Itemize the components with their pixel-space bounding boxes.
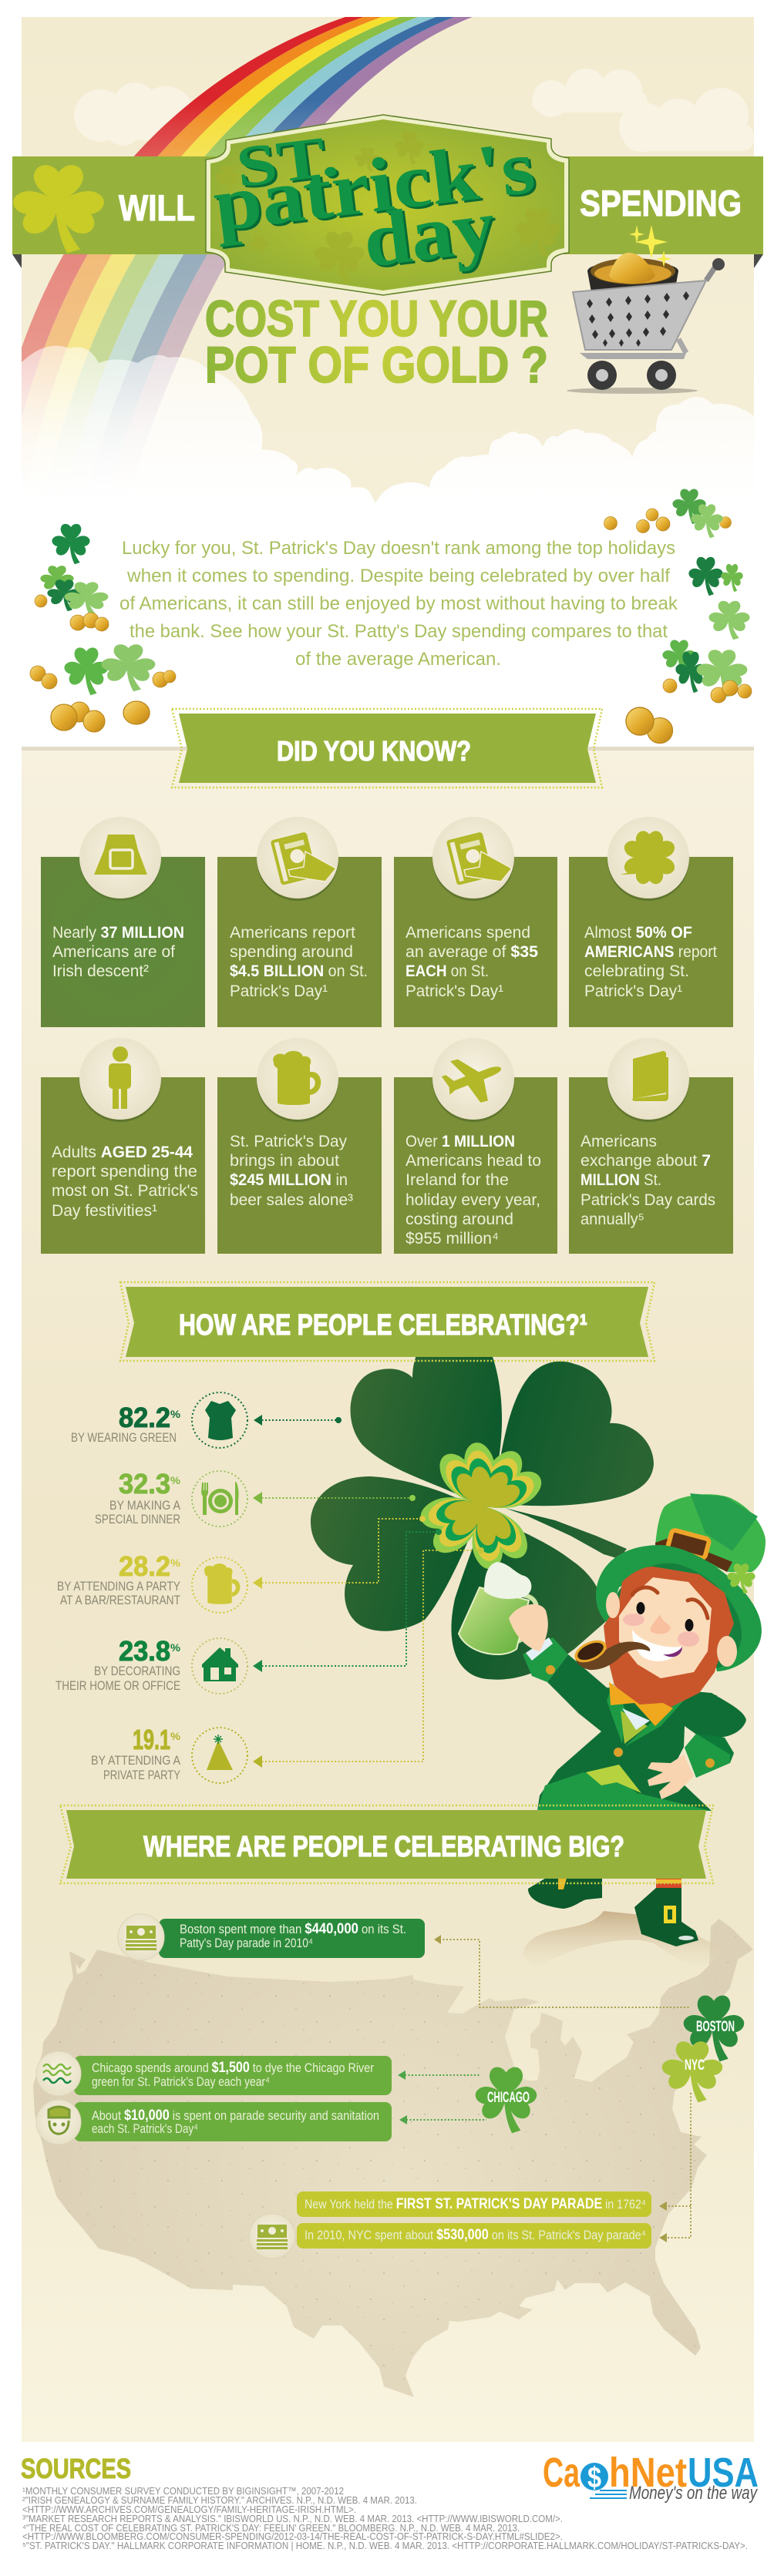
- icon: house: [202, 1647, 238, 1681]
- fact card: 35 each: EACH on St.: [406, 962, 489, 980]
- stat: wearing green: 82.2: [119, 1402, 170, 1433]
- fact card: beer sales: [217, 1038, 382, 1254]
- fact card: 4.5 billion: Americans report: [230, 924, 355, 942]
- heading banner: where are people celebrating big: [60, 1805, 713, 1883]
- badge: [607, 817, 689, 901]
- badge: [257, 817, 338, 901]
- sources list: ¹MONTHLY CONSUMER SURVEY CONDUCTED BY BIGINSIGHT™, 2007-2012: [22, 2485, 344, 2497]
- icon: cash: [257, 2225, 288, 2249]
- fact card: 35 each: an average of $35: [406, 943, 538, 961]
- logo: CashNetUSA: Ca: [543, 2450, 580, 2496]
- intro text: when it comes to spending. Despite being celebrated by over half: [126, 566, 670, 586]
- city marker: Chicago: [473, 2067, 539, 2133]
- fact card: almost 50 percent: Patrick's Day¹: [584, 982, 682, 1000]
- fact card: aged 25-44: report spending the: [52, 1163, 197, 1181]
- fact card: travel to Ireland: [394, 1038, 557, 1254]
- callout: Boston spending: [118, 1914, 425, 1960]
- title text: day: [361, 185, 503, 286]
- callout: first parade: [297, 2191, 651, 2217]
- stat: decorating: BY DECORATING: [94, 1664, 180, 1678]
- fact card: Irish descent: Nearly 37 MILLION: [52, 924, 184, 942]
- icon: clover: [620, 828, 678, 887]
- subtitle: COST YOU YOUR: [205, 290, 548, 347]
- logo: CashNetUSA: USA: [688, 2450, 759, 2496]
- icon: hat: [94, 835, 147, 875]
- title text: ST.: [233, 123, 342, 200]
- fact card: 35 each: [394, 817, 557, 1027]
- sources list: ²"IRISH GENEALOGY & SURNAME FAMILY HISTORY." ARCHIVES. N.P., N.D. WEB. 4 MAR. 2013.: [22, 2494, 417, 2506]
- badge: [257, 1038, 338, 1122]
- fact card: Irish descent: Americans are of: [52, 943, 175, 961]
- cheeks and nose: [623, 1614, 699, 1647]
- pot: [587, 253, 678, 304]
- icon: beer mug: [273, 1051, 321, 1105]
- city marker: Boston: BOSTON: [696, 2019, 735, 2035]
- bow tie: [609, 1682, 673, 1726]
- heading banner: did you know: [172, 709, 602, 788]
- icon: ribbon shamrock: [10, 165, 107, 254]
- ribbon word will: WILL: [119, 187, 195, 228]
- icon: plate and cutlery: [201, 1482, 239, 1515]
- fact card: aged 25-44: Day festivities¹: [52, 1202, 157, 1220]
- logo: CashNetUSA: [543, 2450, 759, 2504]
- badge: [607, 1038, 689, 1122]
- fact card: 4.5 billion: [217, 817, 382, 1027]
- fact card: greeting cards: [569, 1038, 733, 1254]
- fact card: 4.5 billion: Patrick's Day¹: [230, 982, 328, 1000]
- header ribbon: [10, 156, 763, 268]
- rainbow: [22, 17, 473, 436]
- icon: shopping cart with pot of gold: [567, 225, 725, 394]
- inner clover: [416, 1439, 547, 1573]
- fact card: beer sales: beer sales alone³: [230, 1191, 353, 1209]
- stat: decorating: [56, 1635, 247, 1694]
- connector lines: [258, 1420, 481, 1762]
- title text: day: [358, 183, 500, 284]
- badge: [432, 817, 514, 901]
- map connectors: [405, 1940, 691, 2238]
- stat: private party: %: [170, 1730, 181, 1742]
- ground shadow: [523, 1911, 725, 1966]
- ribbon word spending: SPENDING: [580, 183, 742, 223]
- fact card: almost 50 percent: AMERICANS report: [584, 943, 717, 961]
- fact card: travel to Ireland: Over 1 MILLION: [406, 1133, 515, 1150]
- decoration: shamrocks and coins right: [604, 489, 752, 743]
- icon: cash: [126, 1926, 156, 1950]
- fact card: beer sales: St. Patrick's Day: [230, 1133, 347, 1150]
- fact card: aged 25-44: most on St. Patrick's: [52, 1182, 198, 1200]
- fact card: 4.5 billion: spending around: [230, 943, 353, 961]
- stat: private party: PRIVATE PARTY: [103, 1768, 180, 1782]
- intro text: of the average American.: [295, 649, 501, 670]
- subtitle: POT OF GOLD ?: [205, 336, 548, 393]
- callout: NYC spending: [249, 2214, 651, 2259]
- body: [523, 1637, 746, 1811]
- stat: special dinner: 32.3: [119, 1468, 170, 1500]
- stat: private party: [91, 1724, 247, 1783]
- boots: [528, 1872, 698, 1946]
- leprechaun: [459, 1493, 766, 1946]
- badge: [249, 2214, 295, 2259]
- badge: [432, 1038, 514, 1122]
- stat: wearing green: %: [170, 1408, 181, 1420]
- fact card: travel to Ireland: holiday every year,: [406, 1191, 540, 1209]
- title text: patrick's: [211, 126, 542, 250]
- icon: card: [632, 1051, 668, 1101]
- connector arrowheads: [398, 1935, 667, 2242]
- callout: parade security: each St. Patrick's Day⁴: [92, 2121, 198, 2136]
- stat: wearing green: [71, 1392, 247, 1448]
- fact card: travel to Ireland: Americans head to: [406, 1152, 541, 1170]
- decoration: shamrocks and coins left: [30, 524, 176, 732]
- fact card: almost 50 percent: [569, 817, 733, 1027]
- sources heading: SOURCES: [21, 2453, 131, 2484]
- city marker: Chicago: CHICAGO: [487, 2090, 530, 2106]
- fact card: beer sales: $245 MILLION in: [230, 1171, 348, 1189]
- logo: CashNetUSA: $: [587, 2462, 601, 2494]
- callout: parade security: About $10,000 is spent on parade security and sanitation: [92, 2107, 379, 2124]
- callout: Chicago River dye: [36, 2051, 392, 2096]
- eyes: [637, 1602, 694, 1631]
- sources list: <HTTP://WWW.ARCHIVES.COM/GENEALOGY/FAMILY-HERITAGE-IRISH.HTML>.: [22, 2504, 356, 2515]
- stat: wearing green: BY WEARING GREEN: [71, 1430, 177, 1445]
- fact card: greeting cards: MILLION St.: [580, 1171, 661, 1189]
- background clouds: [74, 69, 754, 152]
- fact card: greeting cards: exchange about 7: [580, 1152, 711, 1170]
- callout: first parade: New York held the FIRST ST. PATRICK'S DAY PARADE in 1762⁴: [305, 2196, 646, 2212]
- sources list: ⁴"THE REAL COST OF CELEBRATING ST. PATRICK'S DAY: FEELIN' GREEN." BLOOMBERG. N.P., N.D. WEB. 4 MAR. 2013.: [22, 2522, 520, 2534]
- intro text: Lucky for you, St. Patrick's Day doesn't rank among the top holidays: [122, 538, 675, 559]
- stat: bar or restaurant party: BY ATTENDING A PARTY: [57, 1579, 180, 1594]
- eyebrows: [632, 1587, 708, 1618]
- callout: NYC spending: In 2010, NYC spent about $530,000 on its St. Patrick's Day parade⁴: [305, 2227, 646, 2243]
- fact card: beer sales: brings in about: [230, 1152, 339, 1170]
- fact card: aged 25-44: Adults AGED 25-44: [52, 1144, 193, 1161]
- sources list: [22, 2485, 748, 2551]
- callout: parade security: [36, 2100, 392, 2144]
- title text: patrick's: [209, 123, 539, 247]
- fact card: 35 each: Patrick's Day¹: [406, 982, 503, 1000]
- sources list: <HTTP://WWW.BLOOMBERG.COM/CONSUMER-SPENDING/2012-03-14/THE-REAL-COST-OF-ST-PATRICK-S-DAY.HTML#SLIDE2>.: [22, 2531, 563, 2542]
- logo: CashNetUSA: hNet: [609, 2450, 687, 2496]
- intro text: [119, 538, 678, 670]
- fact card: almost 50 percent: Almost 50% OF: [584, 924, 692, 942]
- stat: private party: BY ATTENDING A: [91, 1753, 181, 1768]
- hat: [596, 1493, 766, 1671]
- stat: bar or restaurant party: %: [170, 1557, 181, 1569]
- icon: party hat: [207, 1735, 233, 1770]
- title text: [206, 99, 548, 304]
- stat: decorating: %: [170, 1641, 181, 1654]
- stat: decorating: THEIR HOME OR OFFICE: [56, 1678, 180, 1693]
- stat: special dinner: [95, 1468, 247, 1526]
- badge: [79, 1038, 161, 1122]
- stat: bar or restaurant party: AT A BAR/RESTAURANT: [60, 1593, 180, 1607]
- beer mug with hand: [459, 1562, 548, 1654]
- intro text: of Americans, it can still be enjoyed by most without having to break: [119, 593, 678, 614]
- fact card: Irish descent: [41, 817, 205, 1027]
- fact card: almost 50 percent: celebrating St.: [584, 962, 689, 980]
- fact card: Irish descent: Irish descent²: [52, 962, 149, 980]
- callout: Chicago River dye: green for St. Patrick's Day each year⁴: [92, 2074, 270, 2089]
- foreground cloud: [22, 346, 754, 751]
- callout: Chicago River dye: Chicago spends around $1,500 to dye the Chicago River: [92, 2060, 374, 2076]
- heading banner: where are people celebrating big: WHERE ARE PEOPLE CELEBRATING BIG?: [143, 1831, 624, 1863]
- stat: special dinner: SPECIAL DINNER: [95, 1512, 180, 1526]
- beard and hair: [604, 1567, 734, 1708]
- connector ends: [253, 1415, 484, 1768]
- badge: [79, 817, 161, 901]
- badge: [36, 2051, 81, 2096]
- fact card: aged 25-44: [41, 1038, 205, 1254]
- fact card: travel to Ireland: costing around: [406, 1211, 513, 1228]
- map of USA: [33, 1911, 753, 2397]
- icon: person: [109, 1046, 131, 1109]
- fact card: 35 each: Americans spend: [406, 924, 530, 942]
- badge: [118, 1914, 164, 1960]
- icon: shirt: [205, 1401, 236, 1440]
- city marker: NYC: NYC: [685, 2057, 705, 2074]
- fact card: greeting cards: annually⁵: [580, 1211, 644, 1228]
- heading banner: how are people celebrating: HOW ARE PEOPLE CELEBRATING?¹: [179, 1309, 587, 1342]
- fact card: 4.5 billion: $4.5 BILLION on St.: [230, 962, 368, 980]
- ears: [606, 1592, 737, 1667]
- badge: [36, 2100, 81, 2144]
- fact card: travel to Ireland: Ireland for the: [406, 1171, 509, 1189]
- pipe: [571, 1636, 650, 1670]
- fact card: travel to Ireland: $955 million⁴: [406, 1230, 499, 1248]
- sparkles: [629, 225, 671, 267]
- intro text: the bank. See how your St. Patty's Day spending compares to that: [130, 621, 668, 642]
- city marker: NYC: [660, 2041, 725, 2102]
- icon: plane: [439, 1049, 508, 1110]
- heading banner: how are people celebrating: [120, 1282, 655, 1361]
- large clover: [311, 1352, 654, 1680]
- mouth: [632, 1630, 682, 1661]
- icon: officer: [49, 2107, 69, 2134]
- icon: beer mug: [204, 1563, 240, 1604]
- stat: bar or restaurant party: [57, 1550, 247, 1613]
- city marker: Boston: [681, 1996, 746, 2061]
- callout: Boston spending: Patty's Day parade in 2010⁴: [180, 1936, 313, 1950]
- heading banner: did you know: DID YOU KNOW?: [277, 735, 471, 767]
- stat: special dinner: BY MAKING A: [109, 1498, 181, 1513]
- stat: private party: 19.1: [133, 1724, 170, 1755]
- title badge: [206, 99, 569, 304]
- callout: Boston spending: Boston spent more than $440,000 on its St.: [180, 1921, 406, 1937]
- face: [619, 1577, 712, 1678]
- icon: money in hand: [272, 833, 336, 884]
- subtitle: [205, 290, 548, 393]
- stat: bar or restaurant party: 28.2: [119, 1550, 170, 1582]
- sources list: ³"MARKET RESEARCH REPORTS & ANALYSIS." IBISWORLD US. N.P., N.D. WEB. 4 MAR. 2013. <HTTP://WWW.IBISWORLD.COM/>.: [22, 2513, 563, 2524]
- fact card: greeting cards: Patrick's Day cards: [580, 1191, 715, 1209]
- icon: money in hand: [448, 833, 512, 884]
- fact card: greeting cards: Americans: [580, 1133, 657, 1150]
- icon: river: [43, 2064, 71, 2083]
- stat: decorating: 23.8: [119, 1635, 170, 1667]
- stat: special dinner: %: [170, 1474, 181, 1486]
- title text: ST.: [235, 126, 345, 202]
